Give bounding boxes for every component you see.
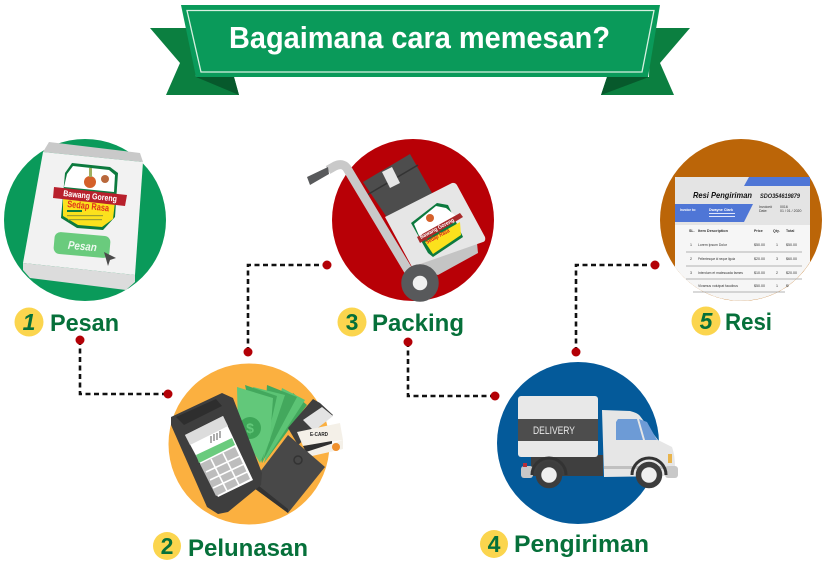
receipt table: $60.00 — [786, 257, 797, 261]
receipt table: $50.00 — [754, 243, 765, 247]
panel: step 3 Packing — [307, 139, 494, 337]
receipt table: Vivamus volutpat faucibus — [698, 284, 738, 288]
icon: bank cards — [288, 399, 343, 456]
icon: box — [363, 154, 432, 222]
icon: cursor — [104, 252, 116, 266]
step label: 3 Packing: Packing — [372, 310, 464, 337]
step label: 4 Pengiriman: 4 — [488, 531, 501, 557]
receipt table: 3 — [776, 257, 778, 261]
receipt table: Qty. — [773, 229, 780, 233]
connector: Packing to Pengiriman — [404, 338, 500, 400]
receipt table: Price — [754, 229, 763, 233]
panel: step 1 Pesan — [4, 139, 166, 337]
receipt table: 2 — [690, 257, 692, 261]
label: packing bag: Sedap Rasa — [425, 227, 451, 246]
connector: Pengiriman to Resi — [572, 260, 660, 356]
icon: receipt: Date: — [759, 209, 767, 213]
icon: bank cards: E-CARD — [310, 432, 328, 438]
button: Pesan — [53, 232, 111, 258]
receipt table: 2 — [776, 271, 778, 275]
step label: 5 Resi: 5 — [700, 308, 714, 334]
icon: wallet — [250, 435, 325, 513]
receipt table: 3 — [690, 271, 692, 275]
receipt table: 1 — [776, 284, 778, 288]
receipt table: $10.00 — [754, 271, 765, 275]
receipt table: Item Description — [698, 229, 728, 233]
step label: 5 Resi — [692, 306, 772, 336]
icon: wheel — [407, 270, 433, 296]
receipt table: SL. — [689, 229, 695, 233]
receipt table: Interdum et malesuada fames — [698, 271, 743, 275]
receipt table: $20.00 — [786, 271, 797, 275]
icon: receipt: Invoice to: — [680, 208, 696, 212]
title: Bagaimana cara memesan? — [229, 20, 610, 55]
icon: money: $ — [246, 420, 254, 436]
label: packing bag — [385, 183, 485, 267]
icon: receipt: 0016 — [780, 205, 788, 209]
icon: delivery truck: DELIVERY — [533, 425, 576, 437]
icon: money — [237, 385, 307, 463]
icon: receipt — [675, 177, 810, 301]
step label: 1 Pesan: 1 — [23, 309, 35, 335]
receipt table: Lorem Ipsum Dolor — [698, 243, 728, 247]
label: product: Sedap Rasa — [67, 199, 110, 214]
panel: step 5 Resi — [660, 139, 822, 336]
icon: receipt: Resi Pengiriman — [693, 190, 752, 200]
label: product — [53, 163, 127, 230]
receipt table: $50.00 — [786, 243, 797, 247]
connector: Pelunasan to Packing — [244, 260, 332, 356]
label: packing bag: Bawang Goreng — [419, 218, 455, 241]
receipt table: $50.00 — [754, 284, 765, 288]
receipt table: $! — [786, 284, 789, 288]
step label: 3 Packing: 3 — [346, 309, 358, 335]
step label: 1 Pesan: Pesan — [50, 310, 119, 337]
step label: 2 Pelunasan — [153, 532, 308, 562]
receipt table: Pellentesque id neque ligula — [698, 257, 735, 261]
icon: receipt: Invoice# — [759, 205, 772, 209]
icon: card terminal — [171, 393, 262, 514]
receipt table: $20.00 — [754, 257, 765, 261]
step label: 5 Resi: Resi — [725, 309, 772, 336]
banner heading — [150, 5, 690, 95]
receipt table: 1 — [776, 243, 778, 247]
label: product: Bawang Goreng — [63, 188, 118, 204]
icon: product bag — [23, 142, 143, 290]
receipt table — [689, 229, 797, 288]
panel: step 4 Pengiriman — [480, 362, 678, 558]
icon: hand truck — [307, 165, 485, 296]
step label: 4 Pengiriman: Pengiriman — [514, 531, 649, 558]
connector: Pesan to Pelunasan — [76, 336, 172, 398]
step label: 3 Packing — [338, 308, 464, 337]
icon: delivery truck — [518, 396, 678, 486]
receipt table: 1 — [690, 243, 692, 247]
step label: 1 Pesan — [14, 308, 119, 337]
icon: receipt: 01 / 01 / 2020 — [780, 209, 801, 213]
panel: step 2 Pelunasan — [153, 364, 343, 562]
receipt table: Total — [786, 229, 794, 233]
button: Pesan: Pesan — [67, 240, 97, 254]
step label: 2 Pelunasan: Pelunasan — [188, 535, 308, 562]
step label: 2 Pelunasan: 2 — [161, 533, 173, 559]
icon: receipt: Dwayne Clark — [709, 207, 734, 212]
icon: receipt: SDO354619879 — [760, 194, 801, 200]
